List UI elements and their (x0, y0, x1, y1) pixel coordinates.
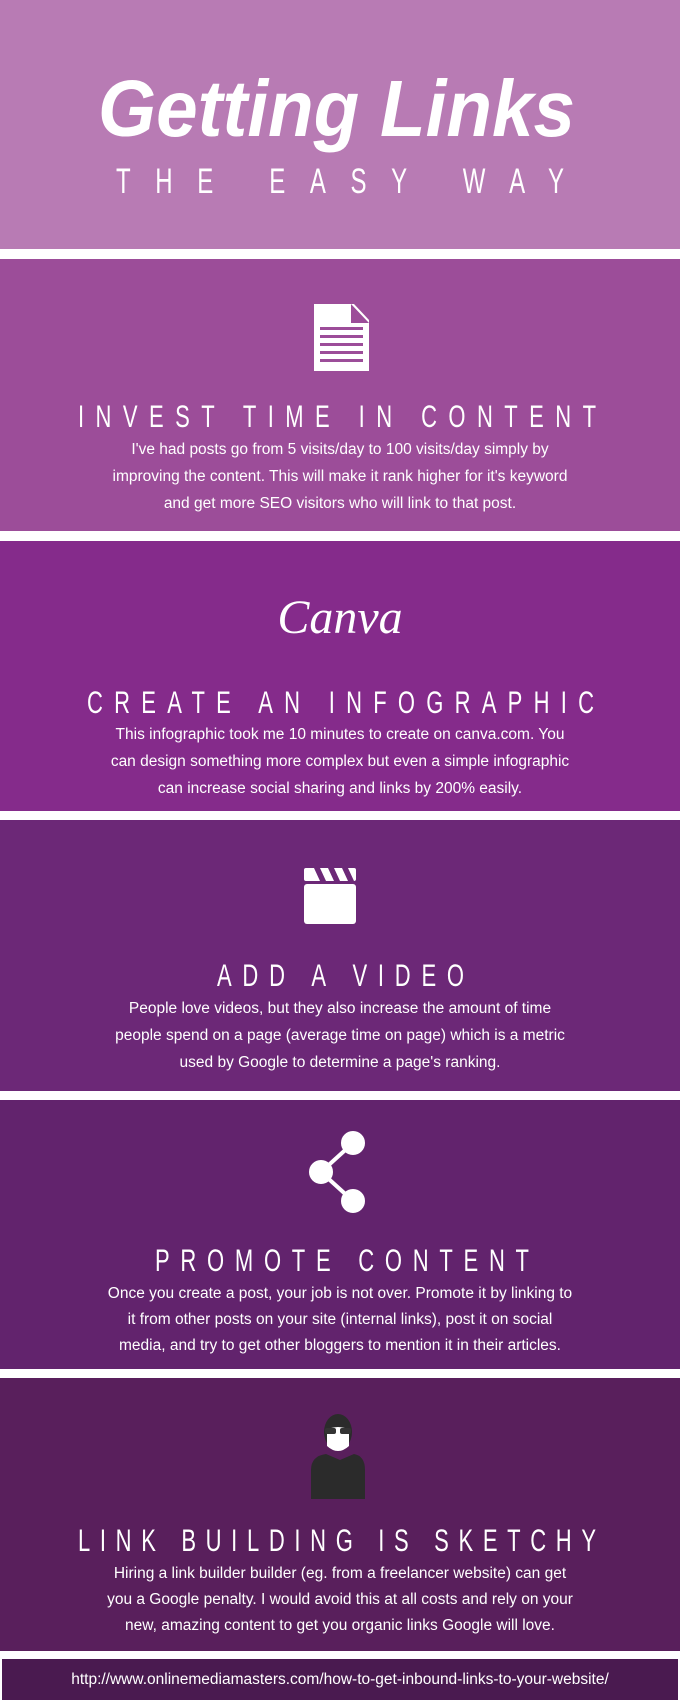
body text (107, 1565, 573, 1634)
footer: http://www.onlinemediamasters.com/how-to-get-inbound-links-to-your-website/ (71, 1671, 609, 1688)
body text: and get more SEO visitors who will link to that post. (164, 495, 516, 512)
panel: promote content (0, 1100, 680, 1369)
body text: people spend on a page (average time on page) which is a metric (115, 1027, 565, 1044)
body text: improving the content. This will make it rank higher for it's keyword (113, 468, 567, 485)
body text (108, 1285, 572, 1354)
icon: document (314, 304, 369, 371)
body text: People love videos, but they also increase the amount of time (129, 1000, 551, 1017)
subtitle: THE EASY WAY (116, 163, 564, 201)
heading: PROMOTE CONTENT (155, 1242, 529, 1278)
title: Getting Links (98, 64, 575, 153)
body text: Once you create a post, your job is not over. Promote it by linking to (108, 1285, 572, 1302)
panel: link building is sketchy (0, 1378, 680, 1651)
heading: LINK BUILDING IS SKETCHY (78, 1522, 596, 1558)
panel: create an infographic (0, 541, 680, 811)
heading: ADD A VIDEO (217, 957, 464, 993)
body text: new, amazing content to get you organic links Google will love. (125, 1617, 555, 1634)
body text (111, 726, 569, 797)
body text: can design something more complex but even a simple infographic (111, 753, 569, 770)
panel: add a video (0, 820, 680, 1091)
body text: you a Google penalty. I would avoid this at all costs and rely on your (107, 1591, 573, 1608)
icon: canva logo: Canva (277, 591, 403, 644)
body text (113, 441, 567, 512)
icon: share (311, 1133, 363, 1211)
body text: This infographic took me 10 minutes to create on canva.com. You (116, 726, 564, 743)
body text: Hiring a link builder builder (eg. from a freelancer website) can get (114, 1565, 567, 1582)
body text: media, and try to get other bloggers to mention it in their articles. (119, 1337, 561, 1354)
footer (2, 1659, 678, 1700)
body text: can increase social sharing and links by 200% easily. (158, 780, 522, 797)
heading: INVEST TIME IN CONTENT (78, 398, 596, 434)
icon: hacker (311, 1414, 365, 1499)
panel: invest time in content (0, 259, 680, 531)
body text: used by Google to determine a page's ranking. (180, 1054, 500, 1071)
body text: it from other posts on your site (internal links), post it on social (128, 1311, 552, 1328)
body text: I've had posts go from 5 visits/day to 100 visits/day simply by (131, 441, 549, 458)
heading: CREATE AN INFOGRAPHIC (87, 684, 594, 720)
icon: clapperboard (304, 868, 356, 924)
panel: header (0, 0, 680, 249)
body text (115, 1000, 565, 1071)
